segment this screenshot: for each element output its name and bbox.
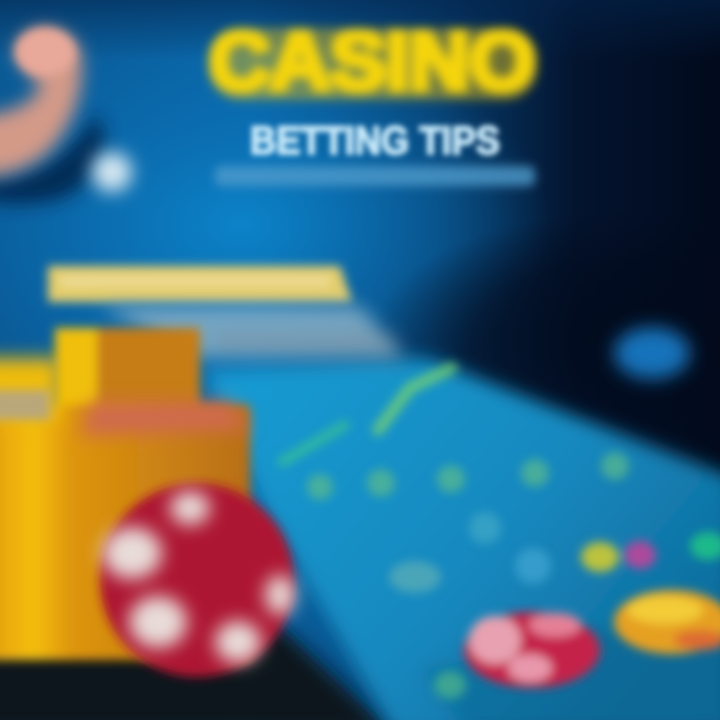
chart line on table — [282, 368, 452, 462]
white ball — [92, 152, 132, 192]
blue blob right — [614, 327, 690, 379]
subtitle caption — [215, 166, 535, 186]
gift box: small — [55, 328, 200, 418]
small green marker bottom — [434, 671, 466, 699]
table surface — [205, 358, 720, 720]
coloured tokens — [581, 532, 720, 572]
heading banner: yellow — [48, 266, 352, 302]
subtitle: BETTING TIPS — [250, 119, 500, 163]
red poker chip — [100, 483, 295, 677]
gift box: large — [0, 358, 250, 660]
gold coins — [614, 590, 720, 654]
pink chips — [464, 612, 600, 688]
table markers — [307, 452, 629, 593]
title: casino: CASINO — [210, 16, 534, 107]
banner: grey labels — [100, 306, 405, 358]
figure: arm — [0, 28, 104, 204]
